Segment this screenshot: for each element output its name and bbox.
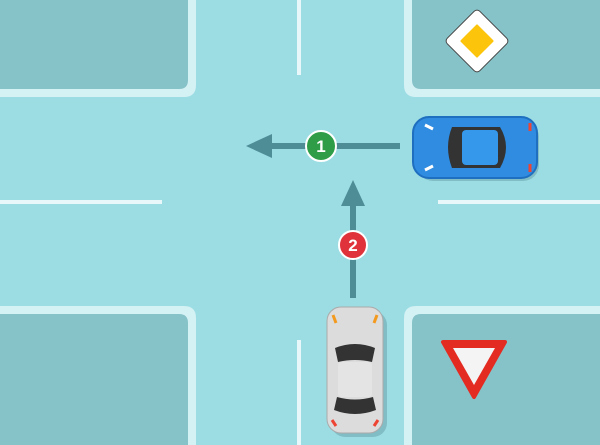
arrow: path 2 <box>341 180 365 298</box>
badge 1 <box>306 131 336 161</box>
block: bottom-left <box>0 306 196 445</box>
badge 2: 2 <box>348 236 358 255</box>
badge 2 <box>339 231 367 259</box>
block: top-left <box>0 0 196 97</box>
badge 1: 1 <box>316 137 326 156</box>
car: blue <box>413 117 539 181</box>
icon: priority road sign <box>444 8 510 74</box>
arrow: path 1 <box>246 134 400 158</box>
car: white <box>327 307 387 437</box>
icon: yield sign <box>443 342 505 397</box>
block: top-right <box>404 0 600 97</box>
block: bottom-right <box>404 306 600 445</box>
